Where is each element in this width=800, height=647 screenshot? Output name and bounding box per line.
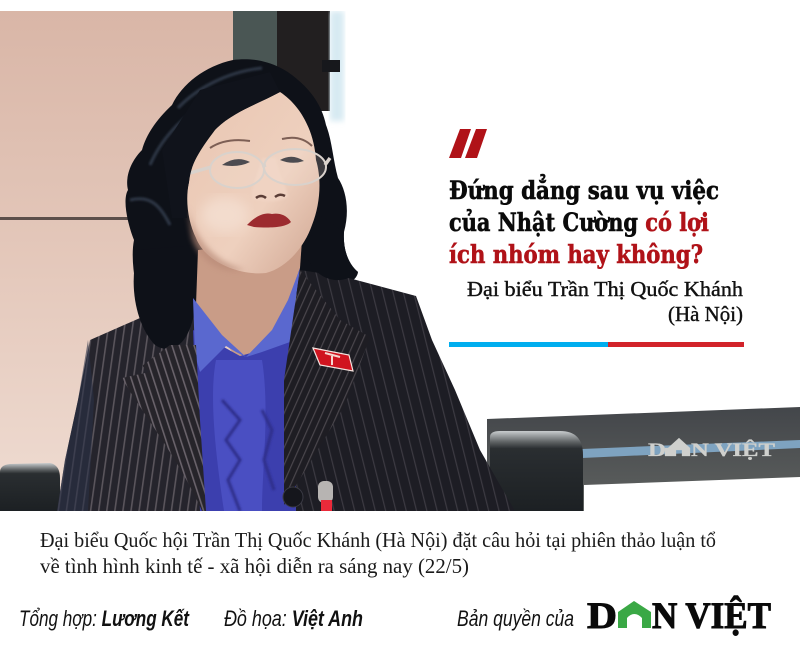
quote heading: Đứng dẳng sau vụ việc xyxy=(449,173,719,206)
credits: Đồ họa: Việt Anh xyxy=(224,606,363,631)
hair front fringe xyxy=(173,86,280,218)
microphone xyxy=(318,481,333,511)
photo background wall xyxy=(0,11,344,511)
logo: Dân Việt: N VIỆT xyxy=(652,595,771,637)
right table band xyxy=(487,407,800,511)
quote heading xyxy=(449,173,719,270)
watermark: Dân Việt: N VIỆT xyxy=(691,439,775,461)
photo caption: về tình hình kinh tế - xã hội diễn ra sáng nay (22/5) xyxy=(40,554,469,578)
attribution: (Hà Nội) xyxy=(668,302,743,326)
jacket lapels xyxy=(122,270,370,511)
blue shirt xyxy=(193,268,300,511)
hair back xyxy=(126,59,358,337)
quote heading: của Nhật Cường có lợi xyxy=(449,208,709,238)
jacket button xyxy=(283,487,303,507)
credits: Bản quyền của xyxy=(457,606,574,631)
attribution: Đại biểu Trần Thị Quốc Khánh xyxy=(467,277,743,301)
photo caption: Đại biểu Quốc hội Trần Thị Quốc Khánh (Hà Nội) đặt câu hỏi tại phiên thảo luận tổ xyxy=(40,528,716,552)
left chair xyxy=(0,463,60,511)
photo: delegate speaking xyxy=(0,11,800,511)
hair highlights xyxy=(130,68,262,225)
parliament badge xyxy=(313,348,353,371)
quote heading: ích nhóm hay không? xyxy=(449,240,703,270)
watermark: Dân Việt: D xyxy=(648,440,666,461)
lips xyxy=(247,213,291,227)
credits: Tổng hợp: Lương Kết xyxy=(19,606,190,631)
eyebrows xyxy=(210,138,312,148)
photo caption xyxy=(40,528,716,578)
credits xyxy=(19,606,574,631)
face xyxy=(187,92,330,273)
eyes xyxy=(222,157,304,166)
icon: green house xyxy=(618,601,651,628)
logo: Dân Việt xyxy=(587,595,771,637)
jacket body xyxy=(57,270,515,511)
logo: Dân Việt: D xyxy=(587,596,617,637)
watermark: Dân Việt xyxy=(648,438,775,461)
nose xyxy=(278,190,287,198)
quote mark xyxy=(449,129,487,158)
glasses xyxy=(190,149,330,188)
divider bar xyxy=(449,342,744,347)
neck xyxy=(196,240,302,362)
hair lower locks over jacket xyxy=(134,232,358,349)
attribution xyxy=(467,277,743,326)
